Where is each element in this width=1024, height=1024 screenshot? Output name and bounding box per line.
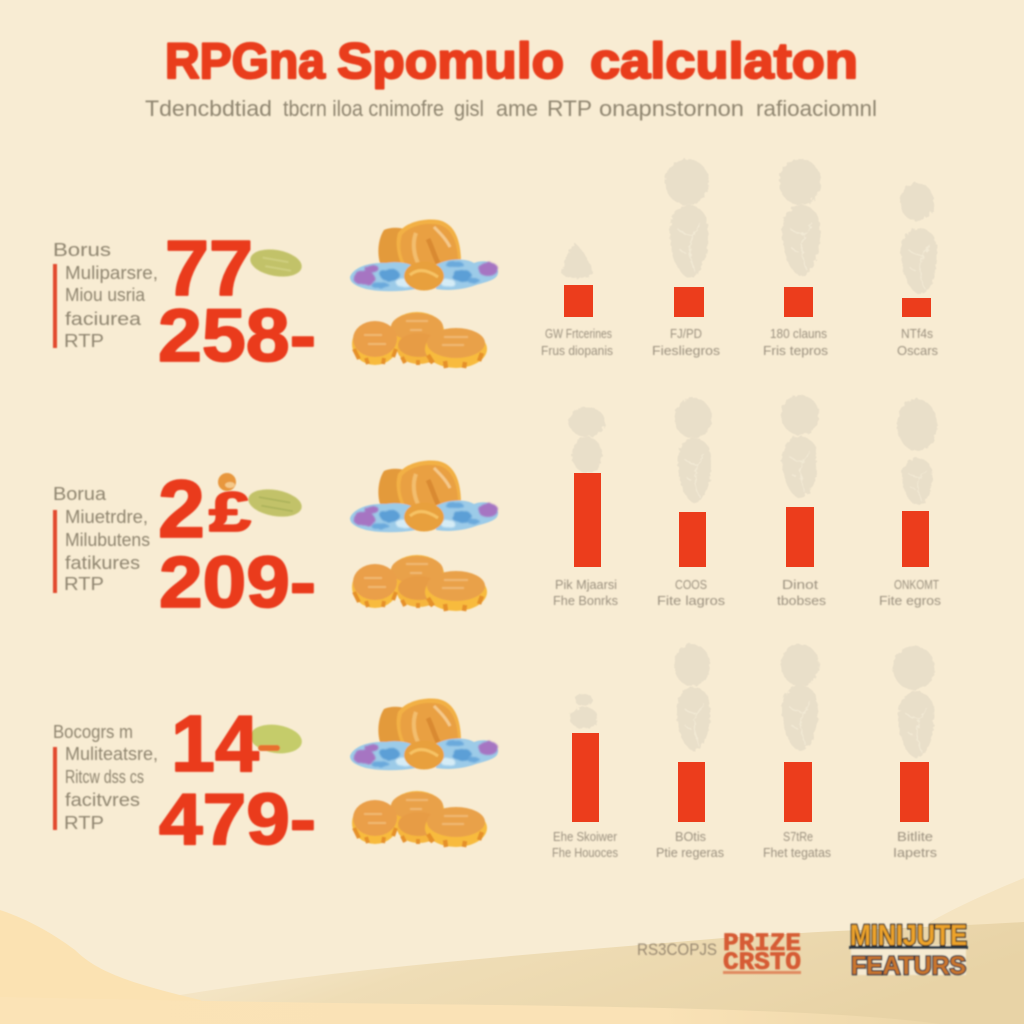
footer logo [849,920,968,980]
row 3 bar chart [552,644,938,860]
bar captions [553,577,942,608]
subtitle: Tdencbdtiad [145,96,272,121]
bar captions: BOtis [675,829,706,844]
subtitle: ame [496,96,538,121]
bar captions: NTf4s [901,326,933,341]
bar captions: Fris tepros [763,343,829,358]
bar captions: Fiesliegros [652,343,721,358]
bar captions: S7tRe [783,829,813,844]
row 1 labels: RTP [64,331,104,351]
bars [574,473,929,567]
bar captions: Dinot [782,577,818,592]
bar captions: GW Frtcerines [545,326,612,341]
silhouettes [562,159,937,294]
title: Spomulo [337,33,564,89]
row 3 figures: 479- [159,780,316,860]
bar captions: Pik Mjaarsi [555,577,617,592]
bar captions [541,326,938,358]
row 2 labels: RTP [64,574,104,594]
row 2 green token [246,486,304,520]
title [165,33,858,89]
bar captions: Ehe Skoiwer [553,829,618,844]
bar captions: Fite egros [879,593,942,608]
row 2 labels: Miuetrdre, [65,507,148,527]
bar captions: ONKOMT [894,577,939,592]
row 2 bar chart [553,395,942,608]
row 3 coin and chip pile [350,699,498,770]
row 1 labels: Borus [53,240,111,260]
panel: row 3 [53,644,938,860]
bar captions [552,829,938,860]
row 3 coin stack [352,791,487,847]
bar captions: tbobses [777,593,827,608]
row 3 figures [159,699,316,860]
bar captions: Fhet tegatas [763,845,831,860]
row 1 coin and chip pile [350,220,498,291]
subtitle: RTP [547,96,592,121]
row 1 figures [158,224,316,377]
row 2 figures [158,464,316,623]
panel: row 2 [53,395,942,623]
title: calculaton [590,33,858,89]
row 3 labels: Ritcw dss cs [65,767,144,787]
subtitle [145,96,877,121]
row 3 green token [248,722,304,756]
row 2 labels: fatikures [65,553,140,573]
bars [564,285,931,317]
footer logo: MINIJUTE [850,920,967,952]
bar captions: FJ/PD [670,326,702,341]
row 1 labels: Miou usria [65,285,146,305]
footer sponsor text: RS3COPJS [637,940,717,959]
bar captions: Iapetrs [893,845,938,860]
row 2 orange token [218,473,236,491]
bar captions: Oscars [897,343,938,358]
row 2 labels: Milubutens [65,530,150,550]
bar captions: Fite lagros [657,593,726,608]
row 1 bar chart [541,159,938,358]
row 2 labels [53,484,150,594]
row 3 figures: 14 [171,699,260,788]
row 1 green token [248,246,304,280]
row 1 labels: Muliparsre, [65,263,158,283]
row 3 labels: RTP [64,813,104,833]
row 2 labels: Borua [53,484,107,504]
footer red stamp [723,929,801,977]
bar captions: 180 clauns [770,326,827,341]
row 2 figures: 2 [158,464,205,555]
footer red stamp: CRSTO [723,948,801,977]
subtitle: gisl [454,96,484,121]
row 3 labels: Bocogrs m [53,722,133,742]
row 1 labels [53,240,158,351]
bars [572,733,929,822]
row 2 figures: 209- [159,543,316,623]
row 3 labels: Muliteatsre, [65,744,158,764]
bar captions: Bitlite [897,829,933,844]
row 1 figures: 258- [158,294,316,377]
row 3 labels [53,722,158,833]
row 1 figures: 77 [165,224,253,312]
subtitle: onapnstornon [599,96,744,121]
footer red stamp: PRIZE [723,929,801,958]
row 3 labels: facitvres [65,790,140,810]
bar captions: Ptie regeras [656,845,724,860]
row 2 figures: £ [209,480,251,543]
subtitle: rafioaciomnl [756,96,877,121]
bar captions: Fhe Bonrks [553,593,618,608]
footer logo: FEATURS [851,952,966,980]
title: RPGna [165,33,326,89]
bar captions: Frus diopanis [541,343,613,358]
row 1 labels: faciurea [65,309,142,329]
row 2 coin stack [352,555,487,611]
subtitle: tbcrn iloa cnimofre [283,96,444,121]
bar captions: Fhe Houoces [552,845,618,860]
silhouettes [569,395,937,505]
row 1 coin stack [352,312,487,368]
bar captions: COOS [675,577,707,592]
panel: row 1 [53,159,938,377]
silhouettes [570,644,935,758]
row 2 coin and chip pile [350,461,498,532]
